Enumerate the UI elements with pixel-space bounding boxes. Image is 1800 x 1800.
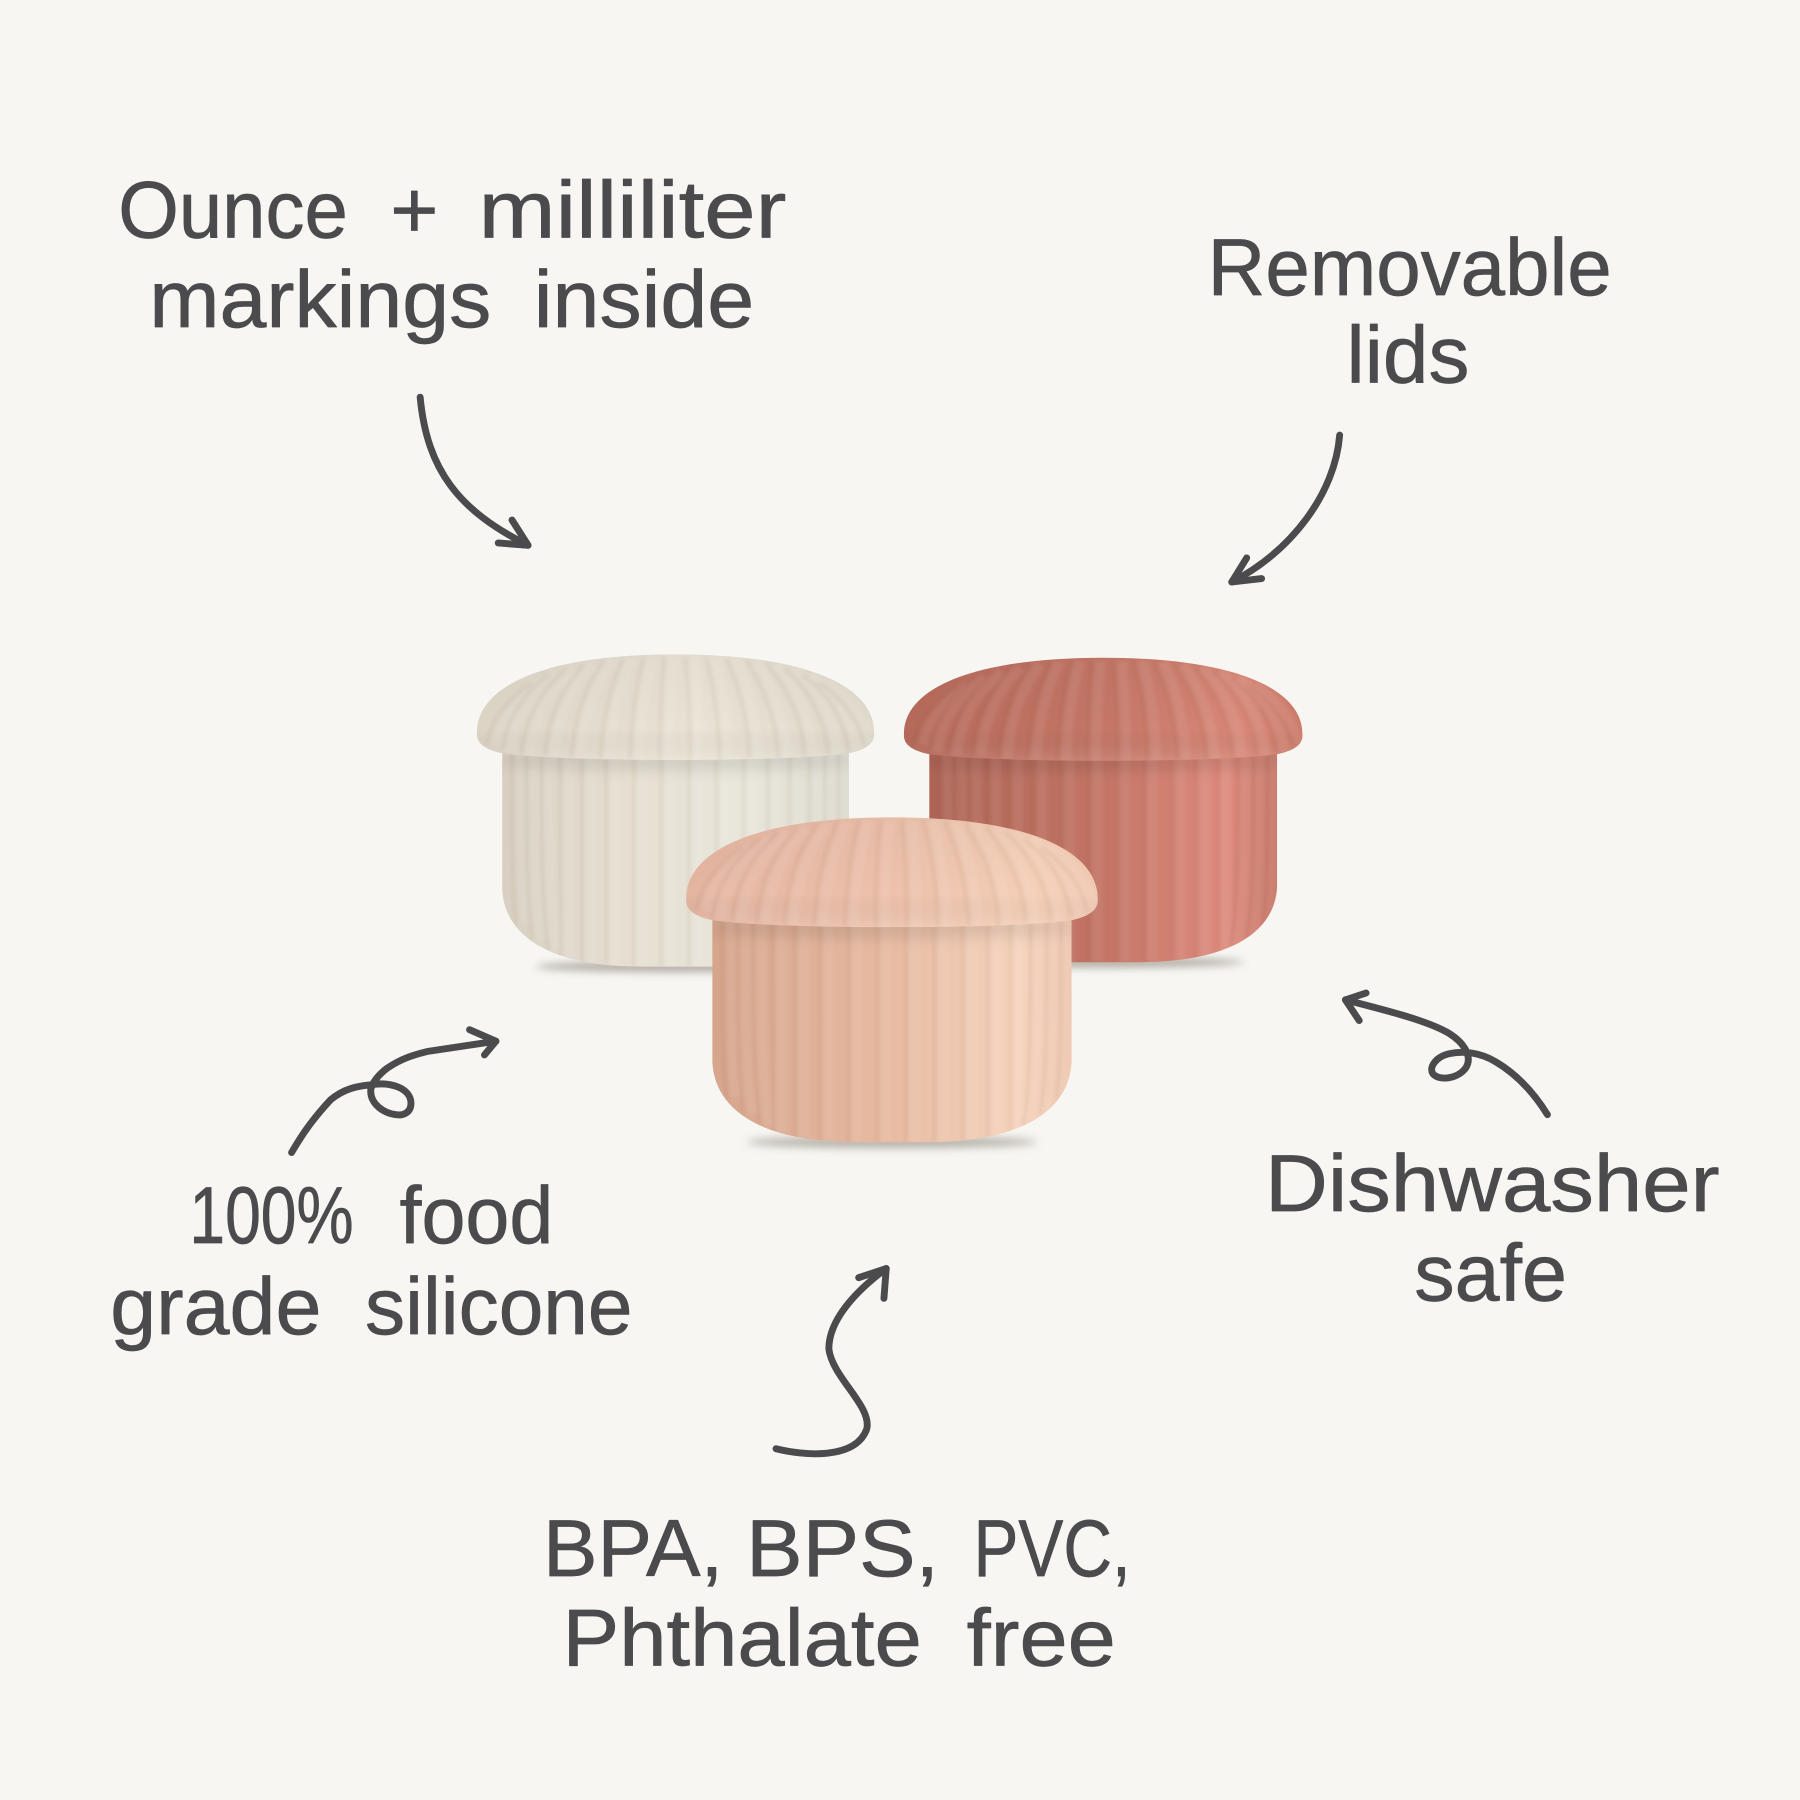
text: food grade silicone: silicone bbox=[365, 1262, 633, 1352]
text: BPA, BPS, PVC, phthalate free: BPS, bbox=[746, 1504, 939, 1594]
text: food grade silicone: food bbox=[399, 1171, 553, 1261]
text: dishwasher safe: Dishwasher bbox=[1265, 1139, 1720, 1229]
text: ounce and milliliter markings: milliliter bbox=[479, 166, 786, 256]
arrow: food grade silicone to cream jar bbox=[292, 1030, 496, 1153]
text: BPA, BPS, PVC, phthalate free: BPA, bbox=[543, 1504, 723, 1594]
arrow: markings to cream jar bbox=[420, 397, 528, 545]
text: food grade silicone: 100% bbox=[189, 1171, 354, 1261]
text: removable lids: lids bbox=[1347, 310, 1469, 400]
text: food grade silicone: grade bbox=[110, 1262, 321, 1352]
arrow: free-from claims to peach jar bbox=[776, 1268, 886, 1454]
text: BPA, BPS, PVC, phthalate free bbox=[543, 1504, 1131, 1684]
text: ounce and milliliter markings: inside bbox=[534, 255, 754, 345]
product: cream jar bbox=[477, 654, 874, 972]
text: dishwasher safe: safe bbox=[1414, 1229, 1567, 1319]
arrow: removable lids to red jar bbox=[1232, 435, 1340, 582]
text: ounce and milliliter markings bbox=[118, 166, 786, 345]
text: dishwasher safe bbox=[1265, 1139, 1720, 1319]
text: BPA, BPS, PVC, phthalate free: Phthalate bbox=[562, 1594, 922, 1684]
text: BPA, BPS, PVC, phthalate free: PVC, bbox=[973, 1504, 1131, 1594]
arrow: dishwasher safe to terracotta jar bbox=[1345, 993, 1547, 1115]
text: ounce and milliliter markings: + bbox=[390, 166, 439, 256]
text: removable lids: Removable bbox=[1208, 223, 1612, 313]
text: ounce and milliliter markings: markings bbox=[149, 255, 491, 345]
text: BPA, BPS, PVC, phthalate free: free bbox=[967, 1594, 1116, 1684]
text: removable lids bbox=[1208, 223, 1612, 400]
product: peach jar bbox=[686, 817, 1098, 1148]
text: ounce and milliliter markings: Ounce bbox=[118, 166, 348, 256]
product: terracotta jar bbox=[904, 658, 1302, 968]
text: food grade silicone bbox=[110, 1171, 633, 1352]
